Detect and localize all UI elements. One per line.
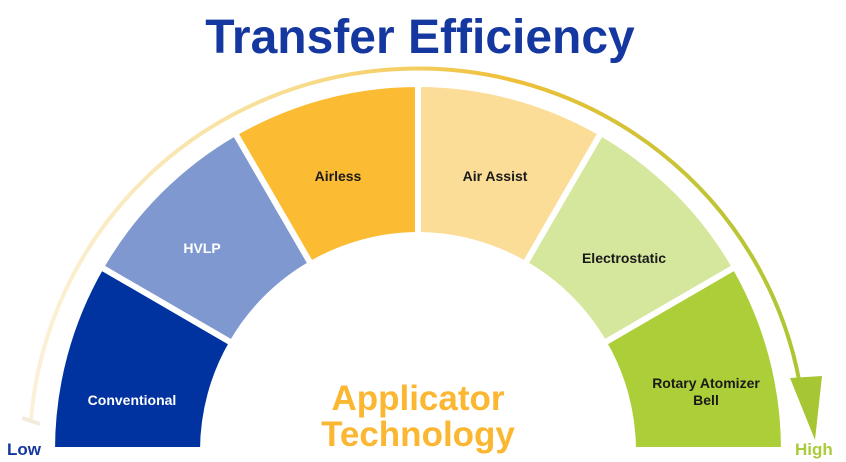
- segment labels: Airless: [315, 168, 362, 184]
- segment labels: [88, 168, 760, 408]
- segment: Airless: [235, 84, 418, 264]
- segment: Air Assist: [418, 84, 601, 264]
- center heading: Applicator: [331, 379, 505, 418]
- center heading: Technology: [321, 415, 515, 454]
- segment labels: Electrostatic: [582, 250, 666, 266]
- segment: Conventional: [52, 267, 232, 450]
- label: High: High: [795, 440, 833, 459]
- segment labels: Bell: [693, 392, 719, 408]
- center heading: [321, 379, 515, 454]
- segment labels: Air Assist: [463, 168, 528, 184]
- semicircle segments: [52, 84, 784, 450]
- segment labels: Rotary Atomizer: [652, 375, 760, 391]
- segment: Rotary Atomizer Bell: [604, 267, 784, 450]
- segment: HVLP: [101, 133, 311, 343]
- segment labels: Conventional: [88, 392, 176, 408]
- arrow: efficiency low to high: [22, 69, 822, 440]
- label: Low: Low: [7, 440, 42, 459]
- title: Transfer Efficiency: [205, 11, 635, 64]
- segment labels: HVLP: [183, 240, 221, 256]
- segment: Electrostatic: [525, 133, 735, 343]
